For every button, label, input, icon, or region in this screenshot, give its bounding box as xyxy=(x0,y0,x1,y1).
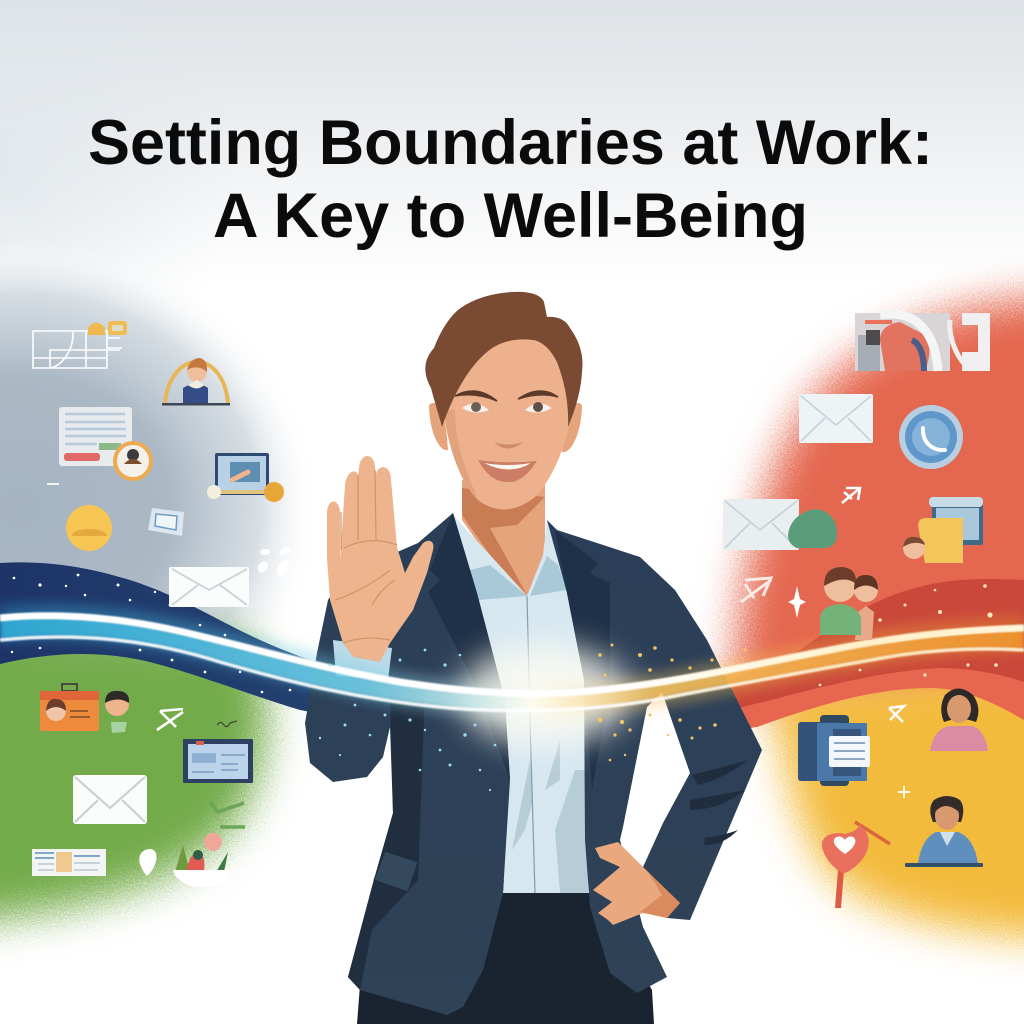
shirt placket xyxy=(527,596,535,893)
palm lines xyxy=(335,470,397,643)
icon: heart lollipop xyxy=(822,822,890,908)
icon: laptop screen xyxy=(207,453,284,502)
icon: orange briefcase xyxy=(40,684,99,731)
title: A Key to Well-Being xyxy=(213,181,808,251)
icon: collage panel xyxy=(855,313,990,371)
neck shadow xyxy=(462,488,545,595)
icon: boy face xyxy=(105,691,129,733)
icon: document card xyxy=(59,407,132,466)
hip hand wrist xyxy=(640,872,680,918)
centre light glow xyxy=(460,645,630,745)
jacket pocket xyxy=(374,851,418,892)
wave band: navy left xyxy=(0,562,420,718)
right lapel xyxy=(555,530,610,790)
neck xyxy=(462,480,545,596)
sparkles xyxy=(11,574,998,791)
icon: spreadsheet grid xyxy=(33,321,127,368)
icon: envelope top right xyxy=(799,394,873,443)
small dash xyxy=(47,483,59,485)
icon: arrow upper right xyxy=(842,488,860,503)
outer beam glow xyxy=(0,622,1024,701)
trousers xyxy=(357,880,654,1024)
icon: plus xyxy=(898,786,910,798)
smile xyxy=(478,460,537,482)
colour field: grey-blue upper left xyxy=(0,220,340,670)
eyes xyxy=(455,391,558,413)
face xyxy=(442,322,572,509)
shirt collar xyxy=(470,556,567,600)
jacket dark side shading xyxy=(348,690,425,990)
hip hand xyxy=(593,842,680,925)
squiggle xyxy=(217,721,237,727)
person xyxy=(305,292,762,1024)
icon: woman in pink xyxy=(930,688,988,751)
icon: envelope lower left xyxy=(73,775,147,824)
icon: small face xyxy=(903,537,925,559)
wave band: dark red right xyxy=(690,579,1024,712)
colour field: green lower left xyxy=(0,620,267,925)
colour field: red upper right xyxy=(732,295,1024,700)
icon: man at desk xyxy=(905,796,983,867)
icon: person at arch xyxy=(162,358,230,406)
jacket right side and right arm xyxy=(547,520,762,993)
icon: white envelope left xyxy=(169,567,249,607)
icon: yellow helmet xyxy=(66,505,112,551)
icon: file folder xyxy=(798,715,870,786)
flow band glow xyxy=(0,616,1024,711)
icon: white petals xyxy=(256,545,292,577)
left lapel xyxy=(428,513,510,780)
icon: avatar badge xyxy=(115,443,151,479)
arm fold shading xyxy=(690,760,748,845)
icon: browser window xyxy=(929,497,983,545)
beam lower line xyxy=(0,637,1024,711)
raised hand xyxy=(327,456,433,662)
icon: two children xyxy=(820,567,878,640)
icon: yellow card xyxy=(918,518,963,563)
icon: sparkle xyxy=(788,586,806,618)
icon: salad bowl xyxy=(173,833,233,887)
icon: arrow mid right xyxy=(741,578,771,602)
beam top line xyxy=(0,616,1024,693)
ears xyxy=(429,403,582,452)
icon: leaf check xyxy=(210,802,245,827)
icon: news card xyxy=(32,849,106,876)
title xyxy=(88,108,933,251)
icon: tablet xyxy=(183,739,253,783)
title: Setting Boundaries at Work: xyxy=(88,108,933,178)
icon: small device xyxy=(148,508,184,536)
wave band: coral stripe right xyxy=(690,635,1024,735)
icon: phone circle xyxy=(899,405,963,469)
icon: arrow lower left xyxy=(157,709,183,730)
nose xyxy=(494,442,523,448)
icon: arrow lower right xyxy=(889,706,904,722)
icon: envelope with green blob xyxy=(723,499,837,550)
shirt xyxy=(453,515,590,893)
face shadow xyxy=(444,410,478,500)
hair xyxy=(425,292,582,427)
colour field: yellow lower right xyxy=(770,660,1024,942)
icon: white pin xyxy=(139,849,157,876)
shirt folds xyxy=(512,740,588,893)
jacket left side and left sleeve xyxy=(305,513,510,1015)
shirt cuff xyxy=(333,640,392,680)
